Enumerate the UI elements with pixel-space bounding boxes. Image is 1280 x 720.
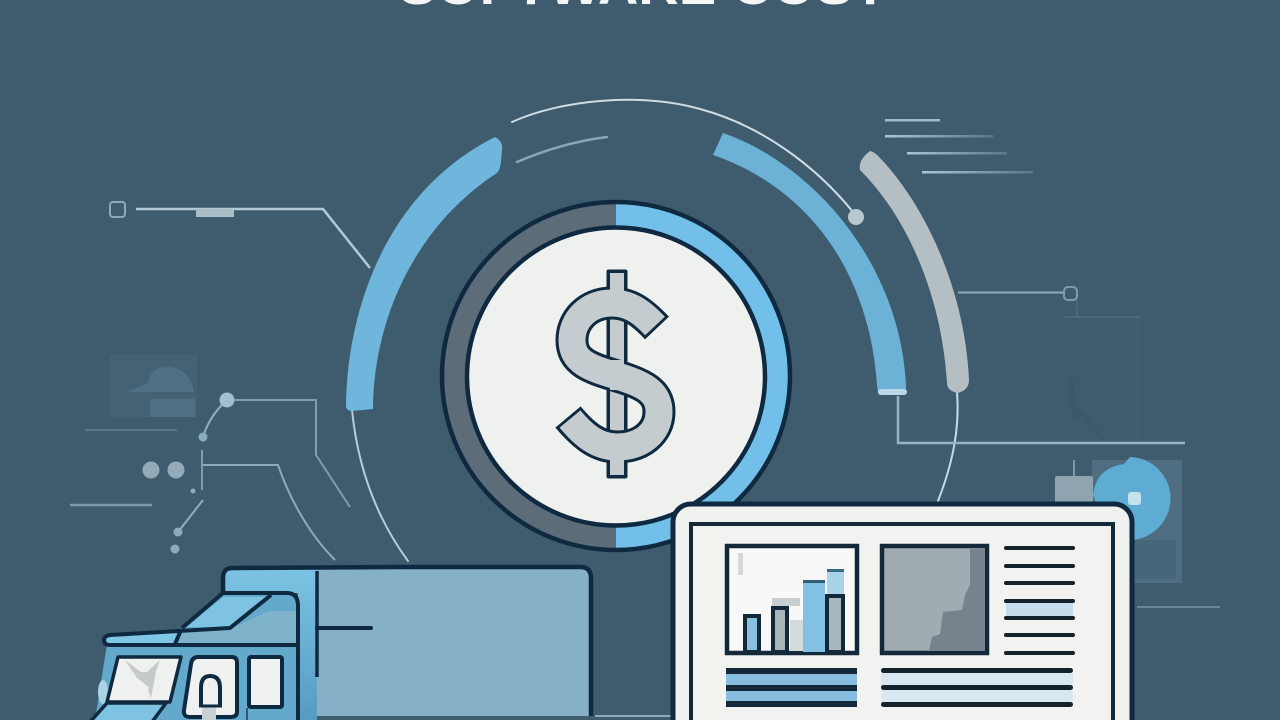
- truck cargo box: [317, 567, 590, 716]
- visor: [104, 630, 181, 643]
- speed lines: upper right: [885, 119, 1033, 174]
- arc: left blue segment: [346, 137, 502, 411]
- headlight: [98, 680, 108, 704]
- cab outlines: [104, 593, 298, 720]
- icon: delivery truck: [90, 567, 591, 720]
- gray image placeholder: [882, 546, 987, 653]
- truck cab upper: [223, 568, 317, 720]
- text lines: lower right: [881, 668, 1073, 707]
- arc: gray segment: [860, 151, 969, 393]
- icon: dollar coin: [442, 202, 790, 550]
- cargo tick: [317, 626, 371, 630]
- arc: right blue segment: [713, 133, 906, 392]
- truck outline top: [223, 567, 591, 716]
- vertical door seam: [315, 571, 319, 677]
- coin ring: blue half: [616, 202, 790, 550]
- door handle base: [199, 704, 222, 708]
- cab side panel: [95, 593, 298, 720]
- icon: right side chart and disc: [1055, 457, 1182, 583]
- connectors: upper left: [110, 202, 370, 268]
- front window: [107, 657, 181, 702]
- arc end cap: [878, 389, 907, 395]
- connectors and nodes: lower left: [70, 355, 350, 560]
- hood: [90, 703, 166, 720]
- connectors: right: [898, 287, 1220, 607]
- text lines: lower left blue: [726, 668, 857, 707]
- panel: dashboard monitor: [673, 504, 1132, 720]
- dollar sign: [568, 270, 659, 478]
- rear window: [249, 657, 282, 707]
- window crack: [125, 660, 160, 698]
- text lines: right column: [1006, 548, 1073, 653]
- door handle loop: [201, 676, 220, 705]
- cab stripe: [176, 611, 296, 643]
- bar chart: [727, 546, 857, 653]
- truck ground line: [595, 715, 672, 717]
- windshield: [187, 597, 270, 628]
- rear door line: [246, 708, 248, 720]
- thin orbit lines: [352, 100, 958, 561]
- coin ring: gray half: [442, 202, 616, 550]
- door window: [184, 657, 237, 717]
- coin face: [467, 228, 765, 526]
